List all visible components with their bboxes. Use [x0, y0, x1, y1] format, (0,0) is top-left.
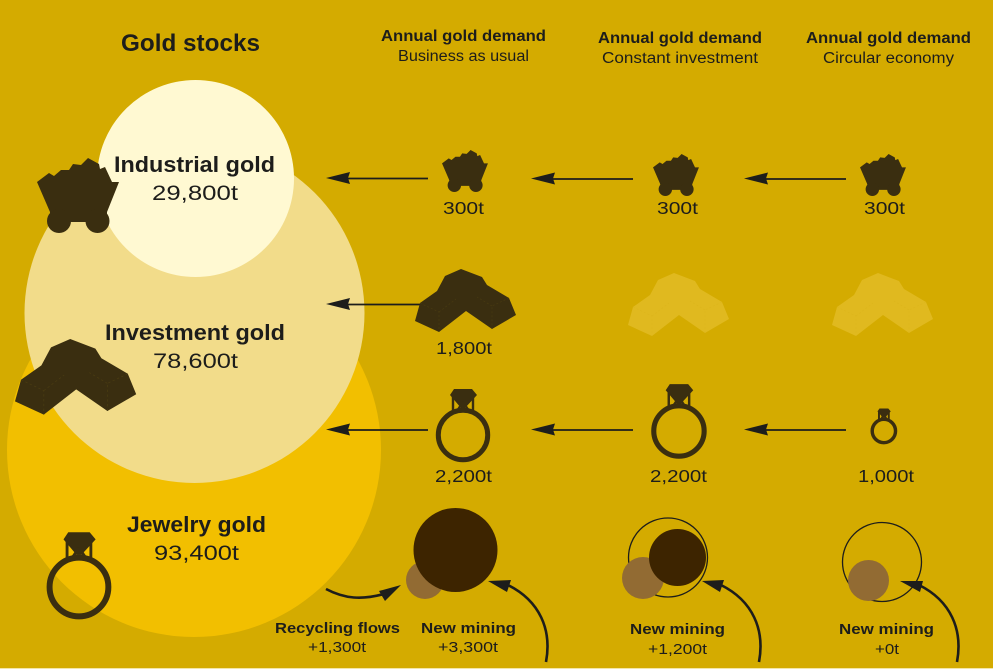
label: jewelry gold: Jewelry gold [127, 512, 266, 537]
icon: gold bars column 1 [415, 269, 516, 332]
value: 300t column 2: 300t [657, 198, 698, 218]
value: 2,200t column 1: 2,200t [435, 466, 492, 486]
label: new mining column 3: New mining [839, 621, 934, 638]
icon: ring column 3 [872, 408, 896, 443]
icon: ore cart column 3 [860, 154, 906, 196]
icon: large gold bars [15, 339, 136, 415]
label: recycling flows: Recycling flows [275, 620, 400, 637]
circle: investment gold stock [24, 143, 364, 483]
heading: business as usual: Business as usual [398, 48, 529, 65]
icon: ring column 1 [438, 389, 488, 460]
label: industrial gold: Industrial gold [114, 152, 275, 177]
label: industrial gold [114, 152, 275, 205]
arrow: new mining column 2 [702, 580, 760, 662]
label: new mining column 1: New mining [421, 620, 516, 637]
arrow: recycling flows [326, 585, 401, 601]
label: new mining column 2 [630, 621, 725, 658]
icon: large ore cart [37, 158, 119, 233]
value: 2,200t column 2: 2,200t [650, 466, 707, 486]
title: Gold stocks [121, 30, 260, 57]
label: new mining column 3 [839, 621, 934, 658]
label: jewelry gold [127, 512, 266, 565]
arrow: investment column 1 [326, 298, 428, 310]
supply circles: constant investment [622, 518, 708, 599]
arrow: jewelry column 3 [744, 424, 846, 436]
label: recycling flows: +1,300t [308, 639, 367, 656]
label: new mining column 1: +3,300t [438, 639, 499, 656]
icon: ore cart column 2 [653, 154, 699, 196]
label: new mining column 2: New mining [630, 621, 725, 638]
circle: jewelry gold stock [7, 263, 381, 637]
heading: constant investment: Constant investment [602, 50, 759, 67]
circle: industrial gold stock [97, 80, 294, 277]
label: new mining column 3: +0t [875, 641, 900, 658]
icon: ore cart column 1 [442, 150, 488, 192]
label: industrial gold: 29,800t [152, 182, 238, 205]
icon: faded gold bars column 3 [832, 273, 933, 336]
arrow: new mining column 3 [900, 581, 958, 662]
label: investment gold: Investment gold [105, 320, 285, 345]
heading: circular economy: Annual gold demand [806, 30, 971, 47]
value: 300t column 1: 300t [443, 198, 484, 218]
arrow: new mining column 1 [488, 580, 547, 662]
icon: ring column 2 [654, 384, 704, 456]
arrow: jewelry column 1 [326, 424, 428, 436]
supply circles: business as usual [406, 508, 498, 599]
heading: circular economy [806, 30, 971, 67]
arrow: jewelry column 2 [531, 424, 633, 436]
heading: circular economy: Circular economy [823, 50, 954, 67]
value: 1,800t: 1,800t [436, 338, 492, 358]
label: investment gold [105, 320, 285, 373]
heading: constant investment: Annual gold demand [598, 30, 762, 47]
label: new mining column 1 [421, 620, 516, 656]
supply circles: circular economy [842, 522, 922, 602]
arrow: industrial column 3 [744, 172, 846, 184]
icon: large ring [50, 532, 108, 616]
label: investment gold: 78,600t [153, 350, 238, 373]
value: 1,000t column 3: 1,000t [858, 466, 914, 486]
heading: business as usual [381, 28, 546, 65]
icon: faded gold bars column 2 [628, 273, 729, 336]
value: 300t column 3: 300t [864, 198, 905, 218]
heading: constant investment [598, 30, 762, 67]
label: recycling flows [275, 620, 400, 656]
heading: business as usual: Annual gold demand [381, 28, 546, 45]
arrow: industrial column 1 [326, 172, 428, 184]
label: jewelry gold: 93,400t [154, 542, 239, 565]
arrow: industrial column 2 [531, 172, 633, 184]
label: new mining column 2: +1,200t [648, 641, 708, 658]
